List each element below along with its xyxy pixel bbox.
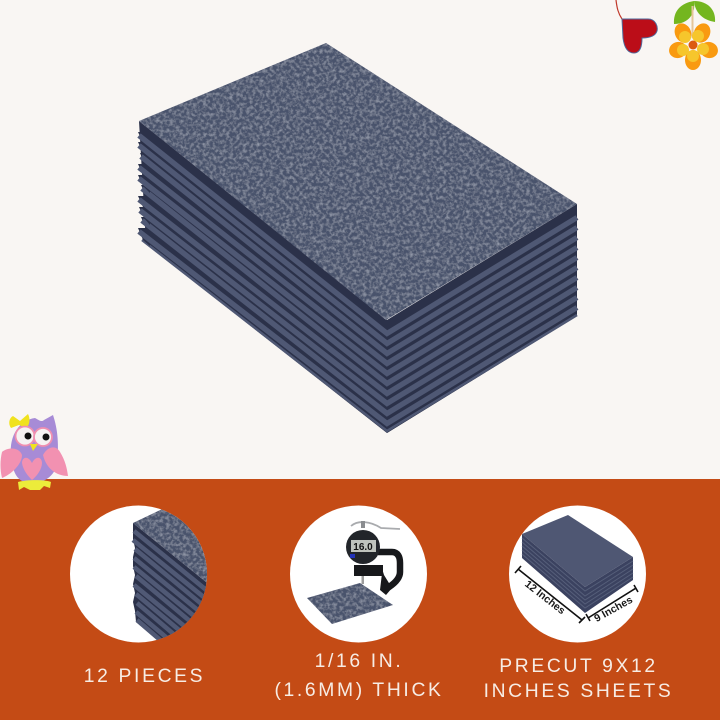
single felt sheet <box>307 583 393 624</box>
panel: size <box>484 506 673 702</box>
panel: 12 pieces <box>70 506 207 682</box>
label: thickness: 1/16 IN. <box>315 651 403 672</box>
label: sheets: INCHES SHEETS <box>484 681 673 702</box>
label: size: PRECUT 9X12 <box>499 656 658 677</box>
felt sheet stack <box>138 43 577 433</box>
icon: felt heart ornament <box>616 0 657 53</box>
top sheet <box>139 43 577 320</box>
circle: thickness gauge: 16.0 <box>353 542 373 553</box>
circle: stack close-up <box>70 506 207 642</box>
panel: thickness <box>274 506 444 701</box>
dimension: 9 inches: 9 Inches <box>592 594 635 625</box>
dimension: 12 inches: 12 Inches <box>522 578 568 617</box>
orange band <box>0 479 720 720</box>
icon: felt flower with leaves <box>667 1 720 70</box>
gauge lever <box>351 522 400 529</box>
circle: thickness gauge <box>290 506 427 642</box>
label: thickness metric: (1.6MM) THICK <box>274 680 444 701</box>
circle: dimensioned stack <box>509 506 646 642</box>
gauge dial <box>346 530 380 564</box>
icon: felt owl <box>0 414 68 490</box>
label: 12 pieces: 12 PIECES <box>84 666 205 687</box>
gauge frame <box>354 552 400 595</box>
